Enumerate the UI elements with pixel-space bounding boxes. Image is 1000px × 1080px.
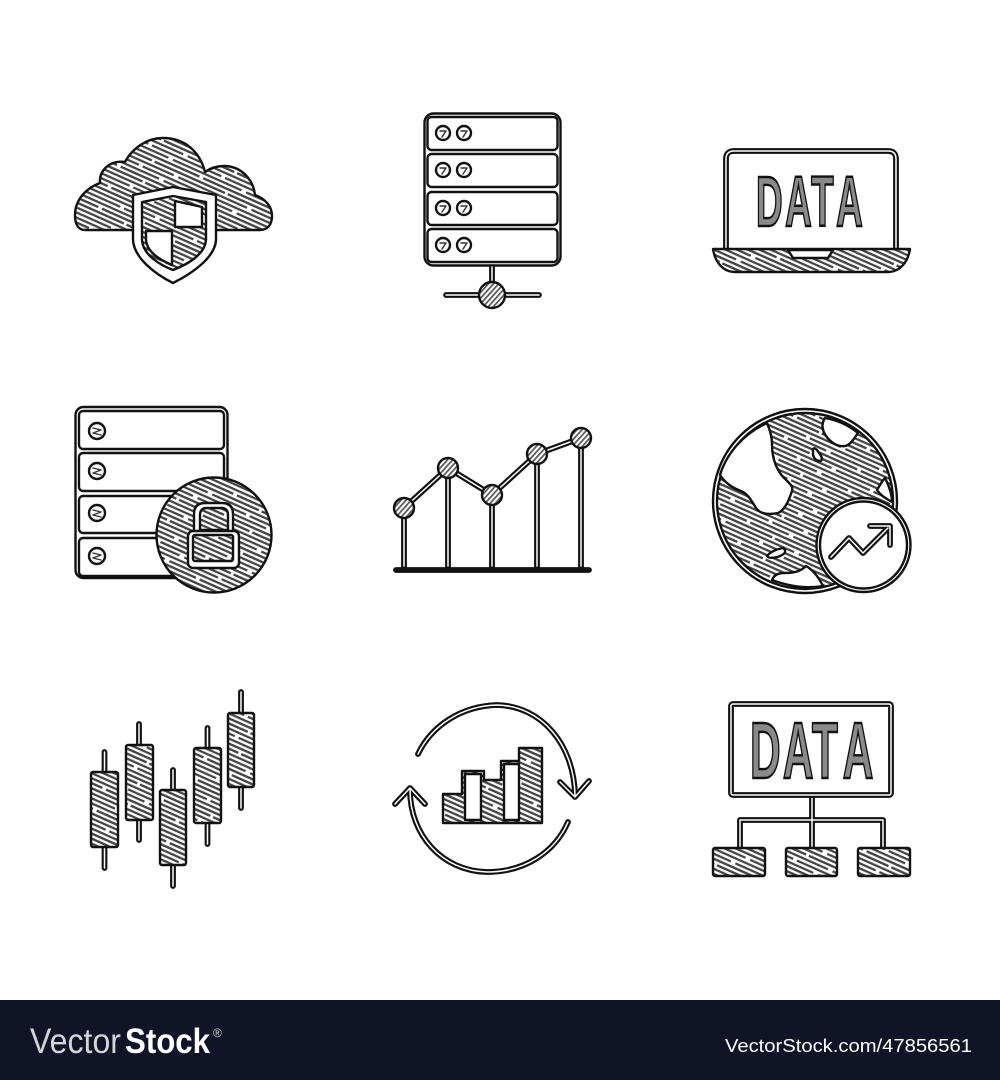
chart points: [394, 428, 591, 518]
database lights: [89, 423, 105, 564]
candle 1: [91, 752, 118, 868]
laptop base: [713, 249, 910, 272]
icon: laptop with data: [713, 151, 910, 272]
candle 5: [228, 692, 254, 808]
child boxes: [713, 848, 910, 876]
icon: globe with trend: [713, 409, 910, 593]
candle 3: [160, 770, 186, 886]
icon: server rack network: [424, 114, 560, 308]
footer logo: Vector: [30, 1022, 121, 1061]
network connector: [446, 267, 539, 308]
laptop screen: [726, 151, 896, 249]
icon: line bar chart: [394, 428, 591, 570]
bars: [443, 748, 542, 823]
chart line: [404, 438, 581, 508]
icon: cloud security shield: [75, 138, 272, 283]
footer bar: [0, 1000, 1000, 1080]
word: DATA: DATA: [756, 162, 863, 241]
footer image id: VectorStock.com/47856561: [725, 1035, 972, 1056]
lock badge: [156, 478, 272, 592]
database rows: [76, 407, 228, 578]
shield: [133, 187, 216, 283]
continents: [720, 418, 892, 587]
icon: candlestick chart: [91, 692, 254, 886]
icon: data hierarchy board: [713, 704, 910, 876]
footer logo: Stock: [125, 1022, 210, 1061]
footer logo: [30, 1022, 210, 1061]
top arrow: [418, 705, 589, 797]
registered mark: ®: [213, 1026, 222, 1040]
candle 2: [126, 724, 153, 840]
server lights: [436, 126, 471, 252]
connector lines: [740, 797, 883, 848]
bottom arrow: [395, 788, 568, 872]
word: DATA: DATA: [750, 706, 873, 795]
globe: [713, 409, 897, 593]
chart bars and baseline: [396, 440, 589, 570]
trend badge: [816, 498, 910, 592]
icon: refresh cycle with bars: [395, 705, 589, 872]
candle 4: [194, 728, 221, 844]
icon: database with lock: [76, 407, 272, 592]
server rows: [424, 114, 560, 266]
data board: [731, 704, 891, 795]
cloud: [75, 138, 272, 230]
